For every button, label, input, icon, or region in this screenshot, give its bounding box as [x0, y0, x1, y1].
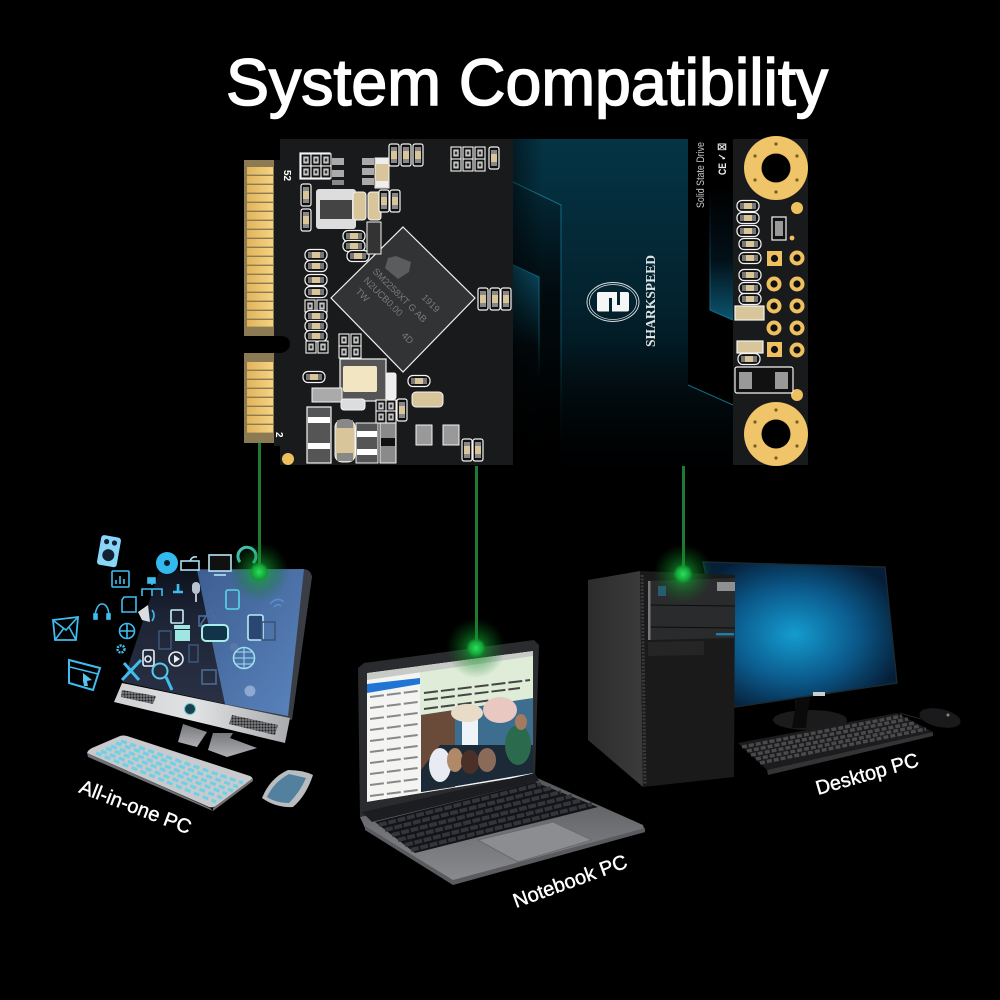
desktop mouse	[900, 705, 962, 731]
brand logo	[587, 282, 639, 322]
SMD components	[300, 144, 511, 463]
silver bezel	[114, 683, 290, 743]
mouse	[262, 770, 313, 807]
green link: all-in-one PC	[229, 443, 289, 602]
certification marks: CE ✓ ☒	[717, 143, 729, 175]
laptop keyboard	[375, 782, 598, 853]
monitor	[703, 562, 897, 707]
green link: desktop PC	[653, 466, 713, 604]
inductor	[316, 189, 356, 229]
monitor frame	[197, 569, 312, 720]
tower front	[640, 571, 735, 787]
desktop keyboard	[738, 713, 933, 775]
screen	[123, 569, 304, 716]
hinge	[362, 773, 539, 822]
lid	[358, 640, 539, 817]
controller chip: 4D	[399, 330, 415, 347]
silk labels 52 and 2: 52	[281, 170, 292, 182]
trackpad	[478, 822, 592, 862]
label: Notebook PC: Notebook PC	[510, 851, 630, 913]
right PCB strip	[733, 136, 808, 466]
all-in-one PC	[53, 535, 313, 811]
product type label: Solid State Drive	[695, 142, 707, 208]
controller chip: 1919	[419, 292, 442, 315]
fiducial	[282, 453, 294, 465]
gold edge connector	[244, 160, 274, 443]
laptop base	[360, 777, 645, 883]
power inductor	[340, 359, 386, 401]
front edge	[365, 826, 645, 885]
label: Desktop PC: Desktop PC	[813, 749, 921, 800]
title: System Compatibility	[226, 45, 828, 119]
teal label area	[513, 139, 734, 466]
floating app icons	[53, 535, 284, 696]
monitor stand	[178, 724, 257, 757]
label: All-in-one PC: All-in-one PC	[76, 776, 194, 839]
green link: notebook PC	[446, 466, 506, 678]
controller chip: N2UCB0.00	[361, 275, 405, 319]
laptop screen	[367, 651, 533, 802]
silk labels 52 and 2: 2	[273, 432, 284, 438]
keyboard	[87, 736, 253, 811]
silk labels 52 and 2	[273, 170, 292, 438]
brand name: SHARKSPEED	[644, 255, 659, 347]
SSD module	[244, 136, 808, 466]
controller chip: SM2258XT G AB	[370, 266, 429, 325]
controller chip	[331, 227, 475, 372]
notebook PC	[358, 640, 645, 885]
desktop PC	[588, 562, 962, 787]
tower side	[588, 571, 643, 787]
monitor stand	[773, 697, 847, 730]
infographic canvas	[52, 56, 960, 908]
bottom capacitors	[307, 407, 331, 463]
PCB left board	[274, 139, 514, 465]
controller chip: TW	[353, 286, 371, 305]
